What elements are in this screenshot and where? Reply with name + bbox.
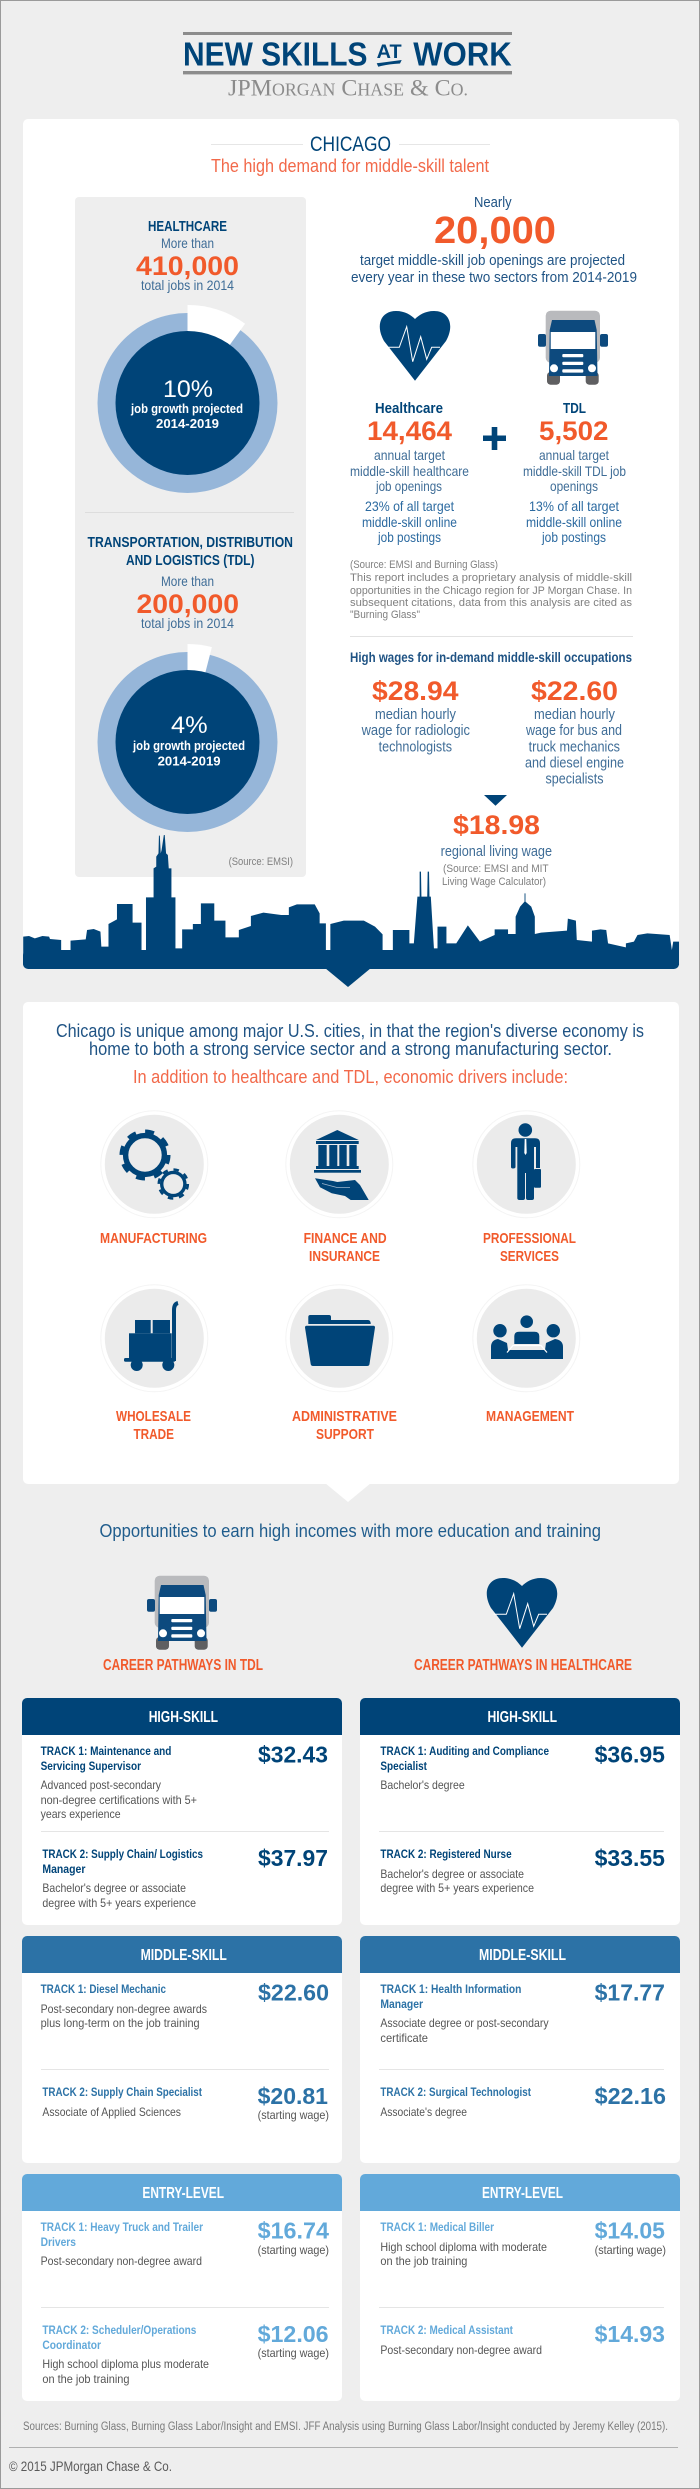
track 1 — [380, 2218, 666, 2268]
source and methodology note: This report includes a proprietary analysis of middle-skill — [350, 572, 632, 584]
track 1: on the job training — [380, 2254, 467, 2268]
icon: truck — [538, 311, 608, 385]
healthcare openings: middle-skill online — [362, 514, 457, 530]
track 2: degree with 5+ years experience — [380, 1881, 534, 1895]
panel: healthcare high-skill: HIGH-SKILL — [488, 1709, 557, 1726]
track 2 — [380, 2083, 666, 2119]
donut: healthcare 10% — [98, 305, 278, 493]
TDL text: AND LOGISTICS (TDL) — [126, 552, 254, 569]
title — [183, 36, 512, 74]
panel: TDL high-skill: HIGH-SKILL — [149, 1709, 218, 1726]
heading: Chicago: CHICAGO — [310, 133, 391, 156]
track 1: Post-secondary non-degree awards — [41, 2002, 207, 2016]
track 1: $16.74 — [258, 2218, 329, 2244]
panel: healthcare high-skill — [360, 1698, 680, 1925]
heading: high wages: High wages for in-demand middle-skill occupations — [350, 649, 632, 665]
icon: plus — [483, 427, 506, 450]
track 2: High school diploma plus moderate — [42, 2357, 209, 2371]
icon: heart pathway — [487, 1578, 557, 1648]
track 1: TRACK 1: Health Information — [380, 1982, 521, 1996]
title: NEW SKILLS — [183, 36, 368, 74]
wage: radiologic technologists: wage for radiologic — [361, 722, 470, 739]
source and methodology note: subsequent citations, data from this analysis are cited as — [350, 597, 633, 609]
track 1: TRACK 1: Medical Biller — [380, 2220, 494, 2234]
healthcare openings: job postings — [377, 529, 441, 545]
healthcare text: 410,000 — [136, 251, 239, 281]
label: professional services — [483, 1230, 576, 1265]
living wage — [441, 810, 552, 888]
label: administrative support: SUPPORT — [316, 1426, 374, 1443]
label: finance and insurance: FINANCE AND — [304, 1230, 387, 1247]
panel: healthcare entry-level: ENTRY-LEVEL — [482, 2185, 563, 2202]
living wage: Living Wage Calculator) — [442, 876, 546, 888]
company name: JPMORGAN CHASE & CO. — [228, 76, 468, 102]
track 2: Coordinator — [42, 2338, 101, 2352]
donut: healthcare 10%: job growth projected — [130, 401, 243, 416]
donut: TDL 4%: 2014-2019 — [158, 754, 221, 769]
label: professional services: SERVICES — [500, 1248, 559, 1265]
track 1: $36.95 — [595, 1742, 665, 1768]
wage: radiologic technologists: median hourly — [375, 706, 456, 723]
donut: TDL 4%: 4% — [171, 712, 208, 739]
track 1: non-degree certifications with 5+ — [41, 1793, 197, 1807]
track 2 — [42, 2083, 329, 2122]
icon: professional with briefcase — [473, 1111, 580, 1218]
wage: bus and truck mechanics: truck mechanics — [529, 739, 620, 756]
panel: high demand card — [23, 119, 679, 987]
track 1: Specialist — [380, 1759, 427, 1773]
TDL openings: 5,502 — [539, 416, 608, 446]
track 2: TRACK 2: Supply Chain/ Logistics — [42, 1847, 203, 1861]
track 1: $22.60 — [258, 1980, 329, 2006]
panel: economic drivers card — [23, 1002, 679, 1502]
label: manufacturing: MANUFACTURING — [100, 1230, 207, 1247]
TDL openings: openings — [550, 478, 598, 494]
label: management: MANAGEMENT — [486, 1408, 574, 1425]
headline stat: nearly 20,000: Nearly — [474, 194, 512, 211]
TDL openings: annual target — [539, 447, 609, 463]
track 2: Post-secondary non-degree award — [380, 2343, 542, 2357]
TDL text: 200,000 — [136, 589, 239, 619]
track 1 — [380, 1742, 665, 1792]
track 2: Associate of Applied Sciences — [42, 2105, 181, 2119]
intro text — [56, 1021, 644, 1059]
panel: TDL entry-level — [22, 2174, 342, 2401]
track 1 — [41, 2218, 329, 2268]
track 2: degree with 5+ years experience — [42, 1896, 196, 1910]
track 1: Servicing Supervisor — [41, 1759, 141, 1773]
track 2: TRACK 2: Scheduler/Operations — [42, 2323, 197, 2337]
healthcare openings: 14,464 — [367, 416, 452, 446]
track 1: Bachelor's degree — [380, 1778, 465, 1792]
track 1: $14.05 — [595, 2218, 665, 2244]
track 1: TRACK 1: Diesel Mechanic — [41, 1982, 166, 1996]
arrow: down to living wage — [484, 795, 507, 806]
healthcare text: HEALTHCARE — [148, 218, 227, 235]
title: AT — [377, 41, 402, 63]
TDL openings: 13% of all target — [529, 498, 619, 514]
icon: bank and hand — [286, 1111, 393, 1218]
wage: bus and truck mechanics — [525, 676, 624, 788]
track 2: TRACK 2: Registered Nurse — [380, 1847, 512, 1861]
headline stat: nearly 20,000: target middle-skill job openings are projected — [360, 252, 625, 269]
track 1: years experience — [41, 1807, 121, 1821]
track 2: Bachelor's degree or associate — [380, 1867, 524, 1881]
icon: gears — [101, 1111, 208, 1218]
healthcare text: More than — [161, 235, 214, 251]
track 1: TRACK 1: Heavy Truck and Trailer — [41, 2220, 203, 2234]
living wage: (Source: EMSI and MIT — [443, 863, 549, 875]
healthcare openings: middle-skill healthcare — [350, 463, 469, 479]
label: professional services: PROFESSIONAL — [483, 1230, 576, 1247]
track 1: Advanced post-secondary — [41, 1778, 161, 1792]
source and methodology note — [350, 559, 633, 621]
track 2: on the job training — [42, 2372, 130, 2386]
TDL text: TRANSPORTATION, DISTRIBUTION — [88, 534, 293, 551]
donut: healthcare 10%: 2014-2019 — [156, 416, 219, 431]
icon: management meeting — [473, 1285, 580, 1392]
label: wholesale trade — [116, 1408, 191, 1443]
track 1: Manager — [380, 1997, 423, 2011]
track 2: TRACK 2: Surgical Technologist — [380, 2085, 531, 2099]
panel: TDL middle-skill — [22, 1936, 342, 2163]
source note: (Source: EMSI) — [229, 856, 293, 868]
headline stat: nearly 20,000: every year in these two sectors from 2014-2019 — [351, 269, 637, 286]
panel: sector totals — [75, 197, 306, 877]
track 1: $32.43 — [258, 1742, 328, 1768]
source and methodology note: "Burning Glass" — [350, 609, 420, 621]
panel: TDL middle-skill: MIDDLE-SKILL — [141, 1947, 227, 1964]
subheading: drivers: In addition to healthcare and TDL, economic drivers include: — [133, 1067, 568, 1087]
icon: truck pathway — [147, 1576, 217, 1650]
healthcare openings: job openings — [375, 478, 442, 494]
wage: radiologic technologists: technologists — [379, 739, 452, 756]
track 2: $14.93 — [595, 2321, 665, 2347]
panel: TDL high-skill — [22, 1698, 342, 1925]
track 2 — [380, 1845, 665, 1895]
TDL openings — [523, 400, 626, 545]
track 2: $33.55 — [595, 1845, 665, 1871]
track 2: (starting wage) — [258, 2108, 329, 2122]
label: wholesale trade: WHOLESALE — [116, 1408, 191, 1425]
label: administrative support — [292, 1408, 397, 1443]
intro text: home to both a strong service sector and a strong manufacturing sector. — [89, 1039, 612, 1059]
track 2 — [42, 2321, 329, 2386]
track 2 — [380, 2321, 665, 2357]
healthcare openings — [350, 400, 469, 545]
track 1: TRACK 1: Auditing and Compliance — [380, 1744, 549, 1758]
heading: opportunities: Opportunities to earn high incomes with more education and training — [100, 1520, 601, 1541]
panel: TDL entry-level: ENTRY-LEVEL — [142, 2185, 224, 2202]
wage: radiologic technologists: $28.94 — [372, 676, 458, 706]
icon: heart — [380, 311, 450, 381]
TDL text — [88, 534, 293, 631]
panel: healthcare middle-skill: MIDDLE-SKILL — [479, 1947, 566, 1964]
headline stat: nearly 20,000 — [351, 194, 637, 286]
copyright: © 2015 JPMorgan Chase & Co. — [9, 2458, 172, 2474]
title: WORK — [413, 36, 512, 74]
wage: radiologic technologists — [361, 676, 470, 756]
TDL openings: middle-skill online — [526, 514, 622, 530]
track 1 — [41, 1980, 329, 2030]
track 1: (starting wage) — [595, 2243, 666, 2257]
donut: TDL 4% — [98, 644, 278, 832]
track 1: High school diploma with moderate — [380, 2240, 547, 2254]
track 2: TRACK 2: Supply Chain Specialist — [42, 2085, 202, 2099]
healthcare openings: annual target — [374, 447, 445, 463]
track 2: TRACK 2: Medical Assistant — [380, 2323, 513, 2337]
donut: healthcare 10%: 10% — [163, 376, 213, 403]
icon: hand truck — [101, 1285, 208, 1392]
skyline — [23, 835, 679, 987]
track 1: TRACK 1: Maintenance and — [41, 1744, 171, 1758]
track 1: Post-secondary non-degree award — [41, 2254, 202, 2268]
panel: healthcare middle-skill — [360, 1936, 680, 2163]
healthcare text: total jobs in 2014 — [141, 277, 234, 293]
icon: folder — [286, 1285, 393, 1392]
TDL text: total jobs in 2014 — [141, 615, 234, 631]
TDL openings: job postings — [541, 529, 606, 545]
track 1: Associate degree or post-secondary — [380, 2016, 549, 2030]
subheading: The high demand for middle-skill talent — [211, 155, 489, 176]
track 1 — [41, 1742, 328, 1821]
track 1: certificate — [380, 2031, 428, 2045]
track 2: (starting wage) — [258, 2346, 329, 2360]
track 1: plus long-term on the job training — [41, 2016, 200, 2030]
wage: bus and truck mechanics: specialists — [546, 771, 604, 788]
track 2: Associate's degree — [380, 2105, 467, 2119]
TDL openings: middle-skill TDL job — [523, 463, 626, 479]
track 1 — [380, 1980, 665, 2045]
panel: healthcare entry-level — [360, 2174, 680, 2401]
headline stat: nearly 20,000: 20,000 — [434, 210, 556, 252]
TDL openings: TDL — [563, 400, 586, 417]
track 2: Bachelor's degree or associate — [42, 1881, 186, 1895]
label: finance and insurance: INSURANCE — [309, 1248, 380, 1265]
source and methodology note: opportunities in the Chicago region for JP Morgan Chase. In — [350, 585, 632, 597]
track 1: $17.77 — [595, 1980, 665, 2006]
healthcare openings: Healthcare — [375, 400, 443, 417]
label: administrative support: ADMINISTRATIVE — [292, 1408, 397, 1425]
label: career pathways in TDL: CAREER PATHWAYS IN TDL — [103, 1657, 263, 1674]
wage: bus and truck mechanics: median hourly — [534, 706, 615, 723]
track 2: $12.06 — [258, 2321, 329, 2347]
donut: TDL 4%: job growth projected — [132, 738, 245, 753]
track 2: Manager — [42, 1862, 86, 1876]
wage: bus and truck mechanics: wage for bus and — [525, 722, 622, 739]
healthcare text — [136, 218, 239, 293]
track 2 — [42, 1845, 328, 1910]
label: career pathways in healthcare: CAREER PATHWAYS IN HEALTHCARE — [414, 1657, 632, 1674]
track 2: $22.16 — [595, 2083, 666, 2109]
header logo — [183, 32, 512, 102]
TDL text: More than — [161, 573, 214, 589]
healthcare openings: 23% of all target — [365, 498, 454, 514]
label: wholesale trade: TRADE — [134, 1426, 174, 1443]
track 1: Drivers — [41, 2235, 76, 2249]
living wage: $18.98 — [453, 810, 540, 840]
source and methodology note: (Source: EMSI and Burning Glass) — [350, 559, 498, 571]
living wage: regional living wage — [441, 843, 552, 860]
track 1: (starting wage) — [258, 2243, 329, 2257]
track 2: $37.97 — [258, 1845, 328, 1871]
wage: bus and truck mechanics: $22.60 — [531, 676, 618, 706]
track 2: $20.81 — [258, 2083, 328, 2109]
intro text: Chicago is unique among major U.S. cities, in that the region's diverse economy is — [56, 1021, 644, 1041]
wage: bus and truck mechanics: and diesel engine — [525, 755, 624, 772]
label: finance and insurance — [304, 1230, 387, 1265]
